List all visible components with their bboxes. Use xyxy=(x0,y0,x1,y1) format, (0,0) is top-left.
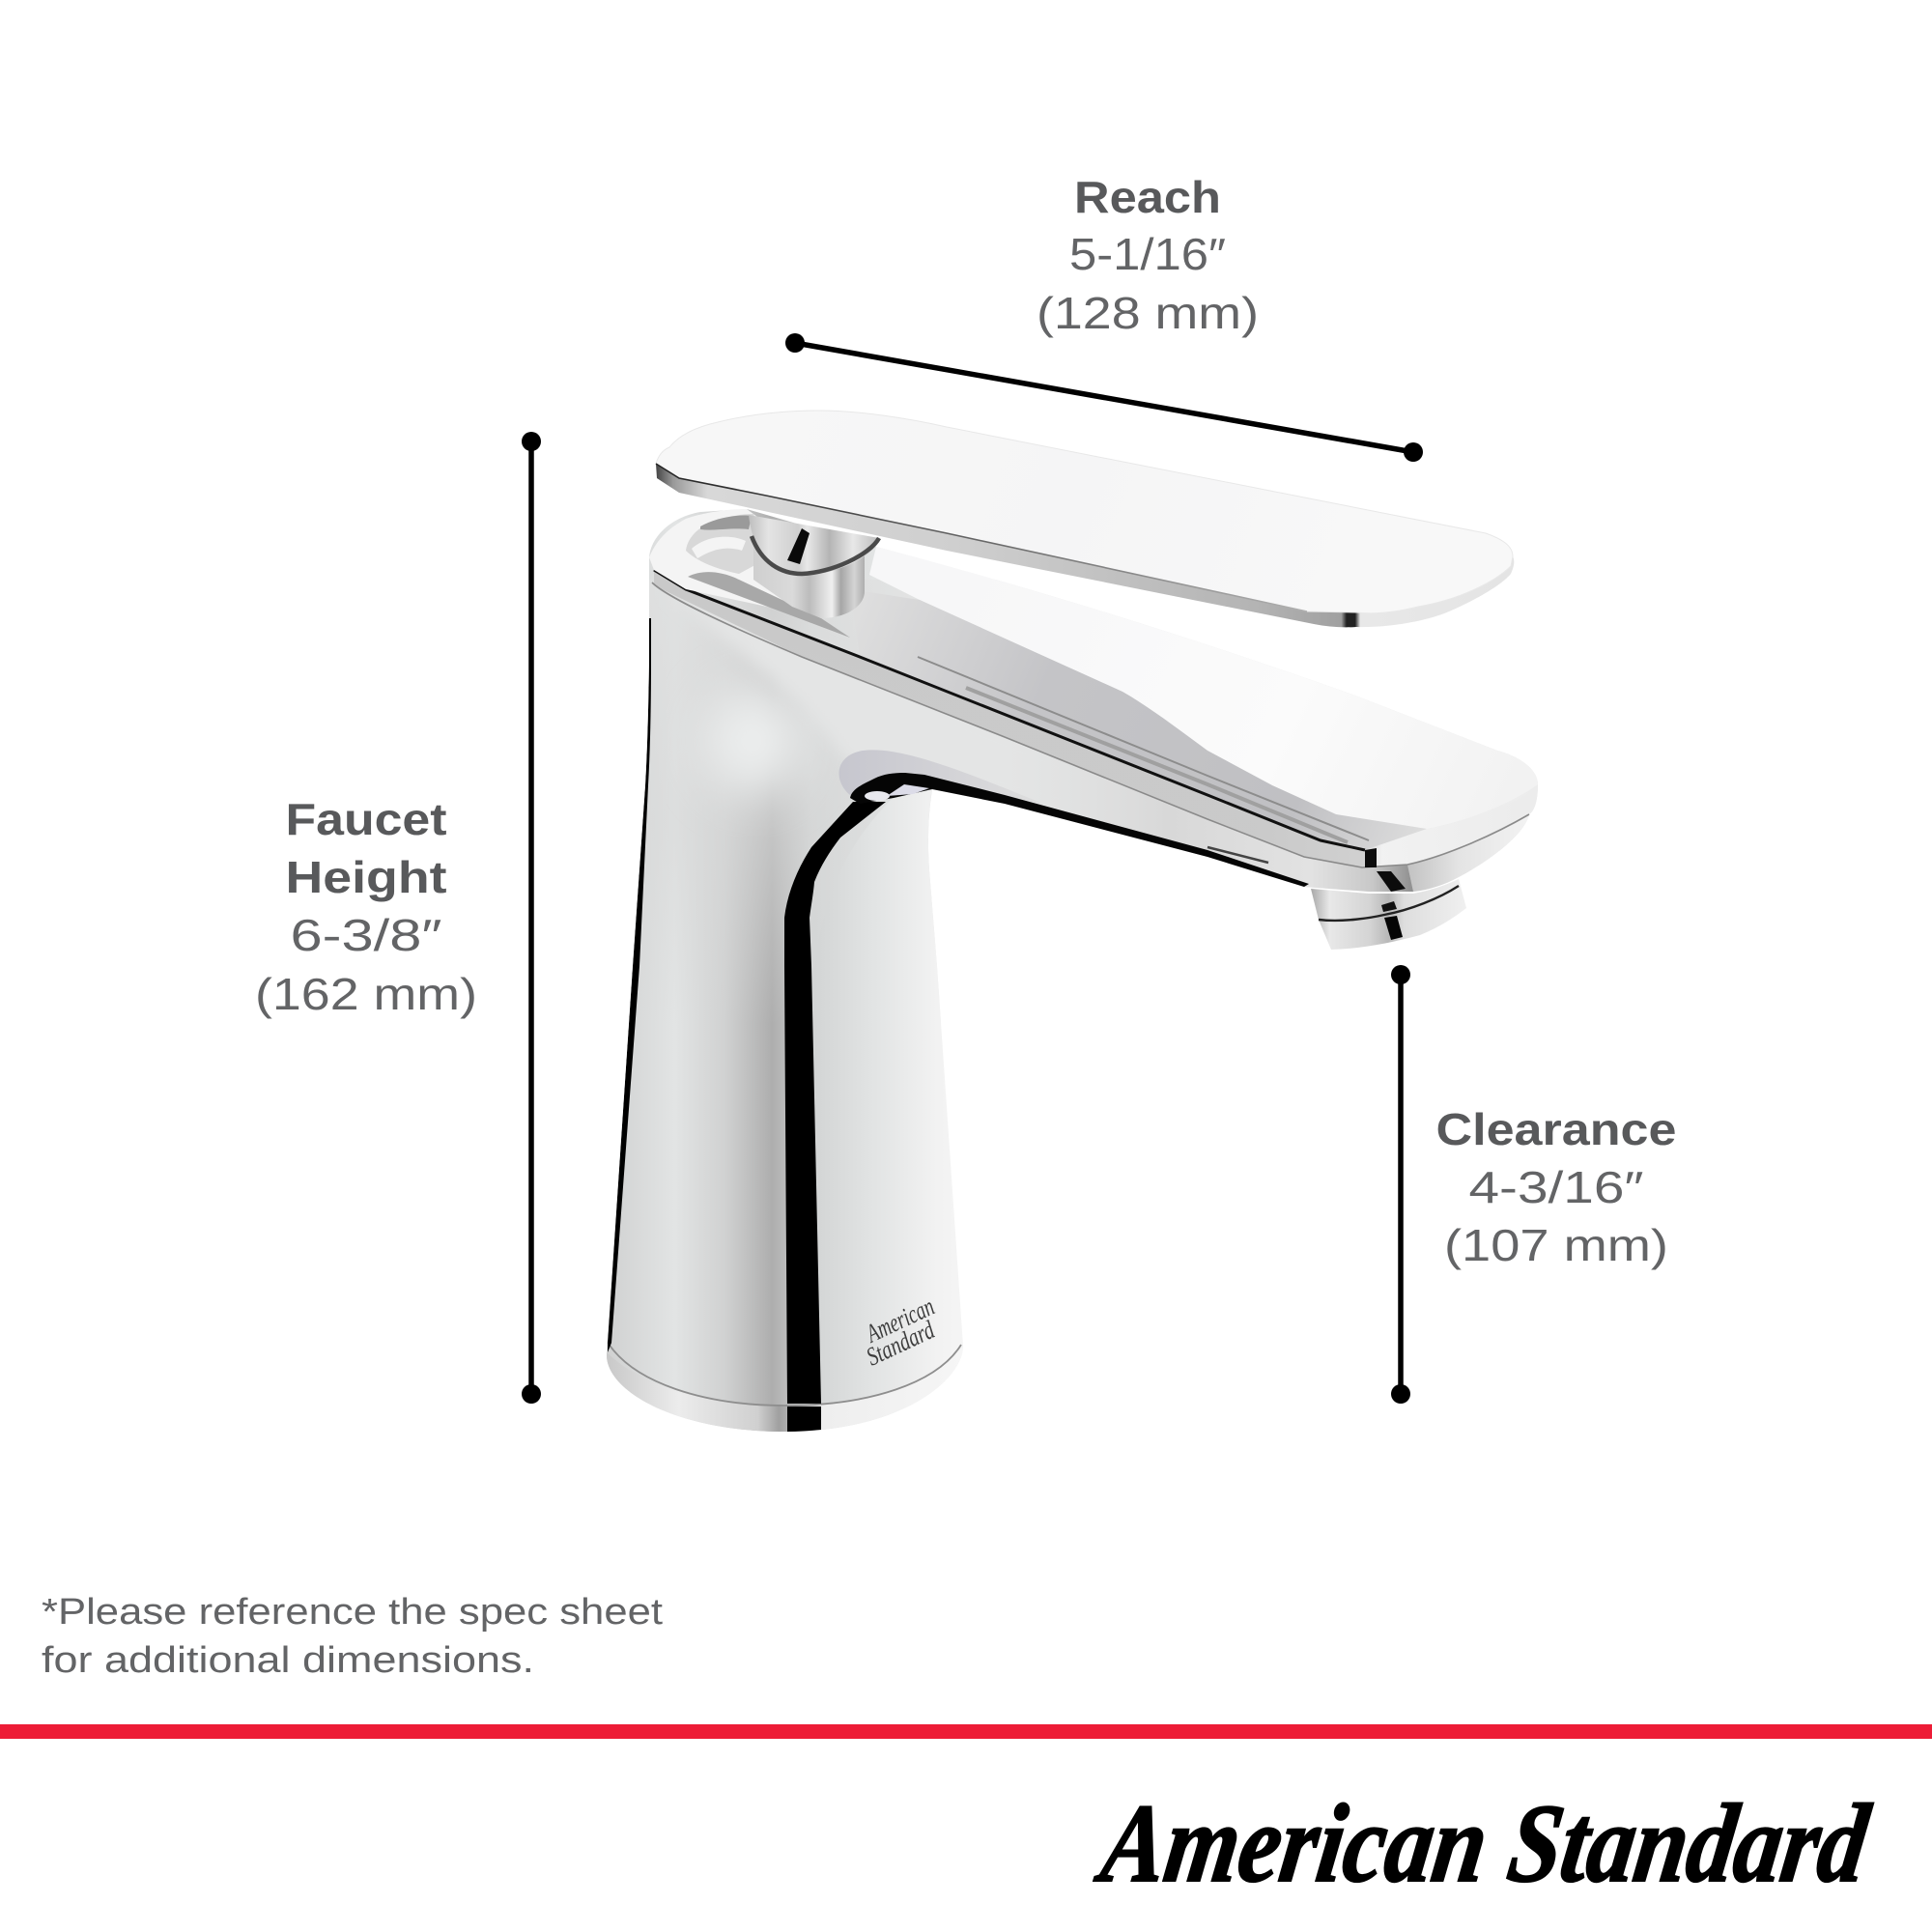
left edge reflection xyxy=(608,618,651,1352)
inner body right of the arch xyxy=(890,789,932,913)
red divider bar xyxy=(0,1724,1932,1739)
dimension line: reach xyxy=(785,333,1423,462)
shadow above the arch xyxy=(838,750,1028,800)
footnote: for additional dimensions. xyxy=(42,1640,534,1681)
label: reach xyxy=(1037,172,1259,338)
American Standard mark on body xyxy=(853,1292,948,1372)
second underside line xyxy=(1208,847,1268,863)
label: reach: Reach xyxy=(1074,172,1221,222)
label: clearance: (107 mm) xyxy=(1444,1220,1668,1270)
base ring xyxy=(607,1352,908,1432)
lever cup xyxy=(749,515,879,576)
label: clearance: 4-3/16″ xyxy=(1468,1162,1644,1212)
faucet product illustration xyxy=(599,411,1565,1439)
American Standard mark on body: American xyxy=(861,1292,939,1349)
tip dark stripe xyxy=(1365,848,1377,867)
body shading group xyxy=(607,593,1091,1432)
thin seam line xyxy=(652,582,1529,867)
socket lower recess xyxy=(688,572,850,638)
dimension line: faucet height xyxy=(522,432,541,1404)
spout side surface xyxy=(718,619,862,753)
socket collar xyxy=(649,509,831,618)
neck reflection xyxy=(1377,871,1406,892)
dark chrome line xyxy=(654,570,1365,850)
chrome band above the seam xyxy=(654,570,1538,867)
label: faucet height: (162 mm) xyxy=(255,969,477,1019)
handle plate rim xyxy=(656,464,1514,627)
recess streaks xyxy=(918,657,1369,840)
American Standard mark on body: Standard xyxy=(862,1315,939,1372)
aerator reflections xyxy=(1384,916,1403,940)
stripe on base xyxy=(787,1406,821,1432)
spout lip xyxy=(1005,737,1413,892)
faucet body silhouette xyxy=(607,509,1538,1432)
label: faucet height: 6-3/8″ xyxy=(290,910,442,960)
footnote xyxy=(42,1592,664,1681)
spout tip lower surface xyxy=(1407,814,1529,892)
label: reach: (128 mm) xyxy=(1037,288,1259,338)
label: faucet height: Faucet xyxy=(286,794,446,844)
spout top white surface xyxy=(869,547,1538,829)
cup black reflection xyxy=(787,528,810,564)
rim seam line xyxy=(656,464,1307,611)
label: clearance: Clearance xyxy=(1435,1104,1677,1154)
spout recessed grey reflection xyxy=(850,589,1427,850)
black arch reflection xyxy=(784,802,886,1404)
label: faucet height xyxy=(255,794,477,1019)
dimension line: clearance xyxy=(1391,965,1410,1404)
label: clearance xyxy=(1435,1104,1677,1270)
handle post xyxy=(753,541,865,618)
aerator xyxy=(1311,879,1466,950)
cup lower band xyxy=(752,536,879,574)
underside black line xyxy=(850,773,1309,887)
footnote: *Please reference the spec sheet xyxy=(42,1592,664,1633)
label: faucet height: Height xyxy=(286,852,446,902)
handle plate top xyxy=(656,411,1513,613)
label: reach: 5-1/16″ xyxy=(1069,229,1226,279)
aerator seam xyxy=(1319,886,1459,921)
socket chrome dish xyxy=(686,514,773,574)
pale underside ellipse xyxy=(865,791,890,801)
